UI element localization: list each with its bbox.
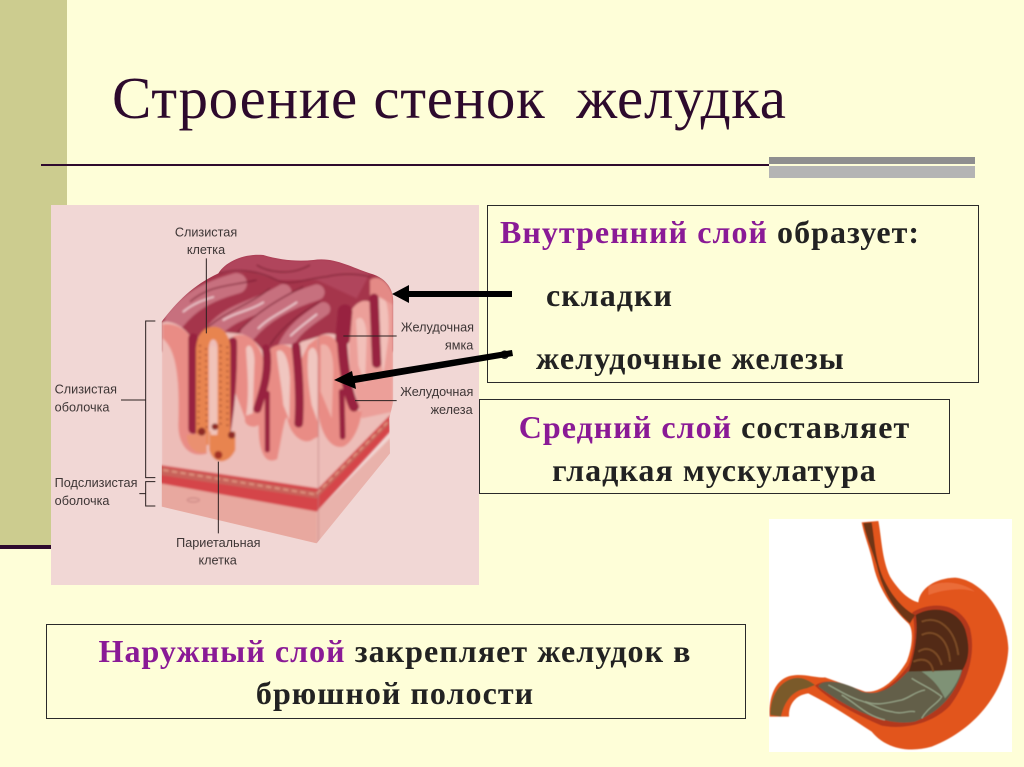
list item: gastric glands: желудочные железы xyxy=(536,340,845,376)
panel: middle layer: Средний слой составляет xyxy=(519,409,910,445)
bullet: • xyxy=(499,336,511,372)
pale fold centres xyxy=(246,346,255,416)
diagram labels: Желудочная xyxy=(401,321,474,335)
diagram labels: оболочка xyxy=(55,494,110,508)
title rule xyxy=(41,157,975,178)
glandular cells xyxy=(187,333,235,461)
callout lines and brackets xyxy=(121,258,397,533)
diagram labels: Слизистая xyxy=(55,383,117,397)
stomach inner lining xyxy=(818,610,968,723)
panel: inner layer xyxy=(487,205,979,383)
gastric pits xyxy=(193,298,377,450)
panel: outer layer xyxy=(46,624,746,719)
stomach outer wall xyxy=(770,521,1008,750)
inner layer heading: Внутренний слой образует: xyxy=(500,214,920,250)
diagram labels: Желудочная xyxy=(400,385,473,399)
diagram labels: клетка xyxy=(198,554,238,568)
block: top surface xyxy=(157,252,400,352)
diagram labels: клетка xyxy=(187,243,226,257)
diagram labels xyxy=(55,225,474,568)
panel: outer layer: Наружный слой закрепляет желудок в xyxy=(99,633,691,669)
diagram labels: Подслизистая xyxy=(55,476,137,490)
list item: folds: складки xyxy=(546,277,673,313)
diagram labels: Слизистая xyxy=(175,225,237,239)
decorative left band xyxy=(0,0,67,205)
arrow: to glands xyxy=(334,350,513,389)
title: Строение стенок желудка xyxy=(112,65,787,131)
esophagus and duodenum lumen xyxy=(770,522,915,717)
diagram labels: оболочка xyxy=(55,400,110,414)
right column xyxy=(348,300,393,418)
diagram labels: ямка xyxy=(445,338,474,352)
diagram labels: Париетальная xyxy=(176,536,261,550)
icon: stomach illustration xyxy=(769,519,1012,752)
salmon folds xyxy=(163,324,207,455)
panel: outer layer: брюшной полости xyxy=(256,675,534,711)
block: submucosa layers xyxy=(160,338,393,545)
panel: middle layer: гладкая мускулатура xyxy=(552,452,877,488)
tissue block illustration xyxy=(157,252,400,545)
arrow: to folds xyxy=(392,285,512,303)
diagram labels: железа xyxy=(431,403,474,417)
panel: stomach wall diagram xyxy=(51,205,479,585)
block: front face mucosa xyxy=(162,278,393,495)
panel: middle layer xyxy=(479,399,950,494)
